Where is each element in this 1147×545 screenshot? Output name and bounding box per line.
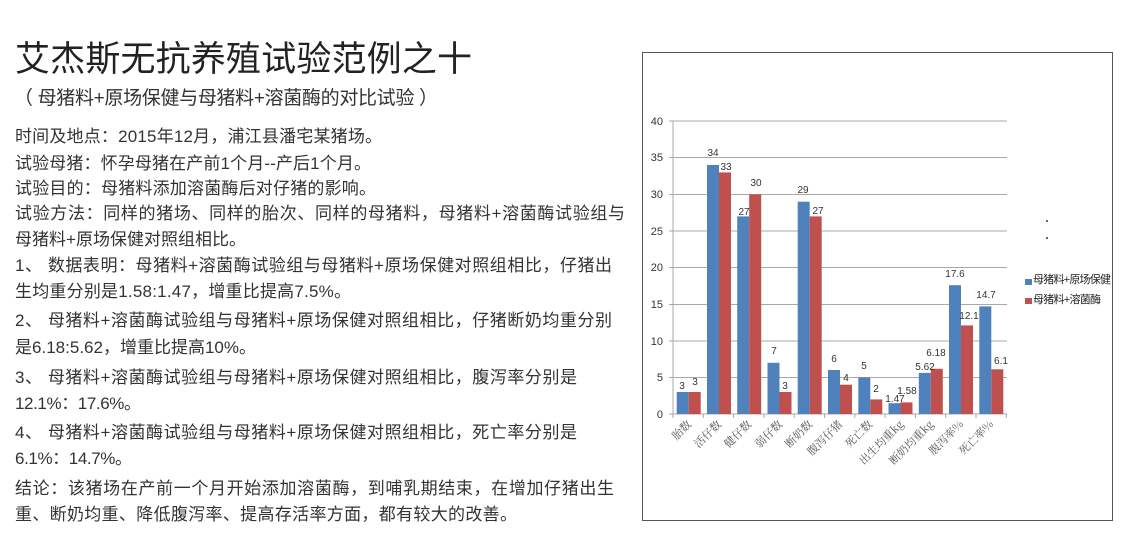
legend: 母猪料+原场保健 (1033, 272, 1111, 286)
data labels: 14.7 (976, 290, 996, 301)
data labels: 3 (679, 381, 685, 392)
bar chart (651, 116, 1008, 468)
category axis labels: 死亡率% (955, 417, 997, 458)
text block: results: 1、 数据表明：母猪料+溶菌酶试验组与母猪料+原场保健对照组相比，仔猪出 (15, 256, 612, 275)
y axis labels (651, 116, 663, 421)
panel: bar chart frame (642, 52, 1112, 520)
text block: results: 是6.18:5.62，增重比提高10%。 (15, 338, 256, 357)
text block: conclusion: 结论：该猪场在产前一个月开始添加溶菌酶，到哺乳期结束，在增加仔猪出生 (15, 479, 614, 498)
red series bars (689, 172, 1003, 414)
y axis labels: 40 (651, 116, 663, 128)
y axis labels: 0 (657, 409, 663, 421)
data labels: 3 (782, 381, 788, 392)
category axis labels (668, 417, 997, 468)
legend (1025, 272, 1111, 306)
data labels: 6 (831, 354, 837, 365)
y axis labels: 35 (651, 152, 663, 164)
legend: 母猪料+溶菌酶 (1033, 292, 1101, 306)
data labels: 6.1 (994, 356, 1008, 367)
text block: results: 6.1%：14.7%。 (15, 449, 132, 468)
data labels: 30 (750, 178, 762, 189)
data labels: 5.62 (915, 362, 935, 373)
category axis labels: 断奶均重kg (885, 417, 937, 468)
text block: trial description: 时间及地点：2015年12月，浦江县潘宅某猪场。 (15, 127, 382, 146)
y axis labels: 10 (651, 336, 663, 348)
data labels: 27 (812, 206, 824, 217)
category axis labels: 活仔数 (690, 417, 725, 451)
data labels: 29 (797, 185, 809, 196)
text block: trial description: 试验母猪：怀孕母猪在产前1个月--产后1个月。 (15, 154, 371, 173)
data labels: 33 (720, 162, 732, 173)
text block: trial description: 试验方法：同样的猪场、同样的胎次、同样的母猪料，母猪料+溶菌酶试验组与 (15, 204, 625, 223)
blue series bars (677, 165, 991, 414)
data labels: 6.18 (926, 348, 946, 359)
category axis labels: 断奶数 (781, 417, 816, 451)
data labels: 4 (843, 373, 849, 384)
category axis labels: 腹泻仔猪 (803, 417, 846, 459)
data labels: 34 (707, 148, 719, 159)
data labels: 7 (771, 346, 777, 357)
data labels: 27 (738, 207, 750, 218)
text block: results: 4、 母猪料+溶菌酶试验组与母猪料+原场保健对照组相比，死亡率分别是 (15, 423, 577, 442)
title: 艾杰斯无抗养殖试验范例之十 (15, 40, 472, 79)
category axis labels: 胎数 (668, 417, 695, 443)
data labels (679, 148, 1008, 405)
data labels: 1.58 (897, 386, 917, 397)
data labels: 3 (692, 377, 698, 388)
y axis labels: 5 (657, 372, 663, 384)
category axis labels: 死亡数 (841, 417, 876, 451)
data labels: 12.1 (959, 311, 979, 322)
text block: trial description (15, 127, 625, 249)
data labels: 1.47 (885, 394, 905, 405)
text block: conclusion: 重、断奶均重、降低腹泻率、提高存活率方面，都有较大的改善。 (15, 505, 517, 524)
y axis labels: 30 (651, 189, 663, 201)
category axis labels: 腹泻率% (925, 417, 967, 458)
data labels: 17.6 (945, 269, 965, 280)
y axis labels: 20 (651, 262, 663, 274)
text block: conclusion (15, 479, 614, 524)
y axis labels: 15 (651, 299, 663, 311)
text block: results: 12.1%：17.6%。 (15, 394, 141, 413)
category axis labels: 出生均重kg (855, 417, 907, 468)
data labels: 2 (873, 384, 879, 395)
text block: results: 3、 母猪料+溶菌酶试验组与母猪料+原场保健对照组相比，腹泻率分别是 (15, 368, 577, 387)
text block: results: 生均重分别是1.58:1.47，增重比提高7.5%。 (15, 282, 351, 301)
text block: results (15, 256, 612, 468)
subtitle: （ 母猪料+原场保健与母猪料+溶菌酶的对比试验 ） (14, 87, 438, 109)
text block: trial description: 母猪料+原场保健对照组相比。 (15, 230, 246, 249)
text block: trial description: 试验目的：母猪料添加溶菌酶后对仔猪的影响。 (15, 179, 376, 198)
category axis labels: 弱仔数 (751, 417, 786, 451)
y axis labels: 25 (651, 226, 663, 238)
text block: results: 2、 母猪料+溶菌酶试验组与母猪料+原场保健对照组相比，仔猪断奶均重分别 (15, 311, 612, 330)
category axis labels: 健仔数 (720, 417, 755, 451)
data labels: 5 (861, 361, 867, 372)
stray dots (1046, 220, 1048, 239)
